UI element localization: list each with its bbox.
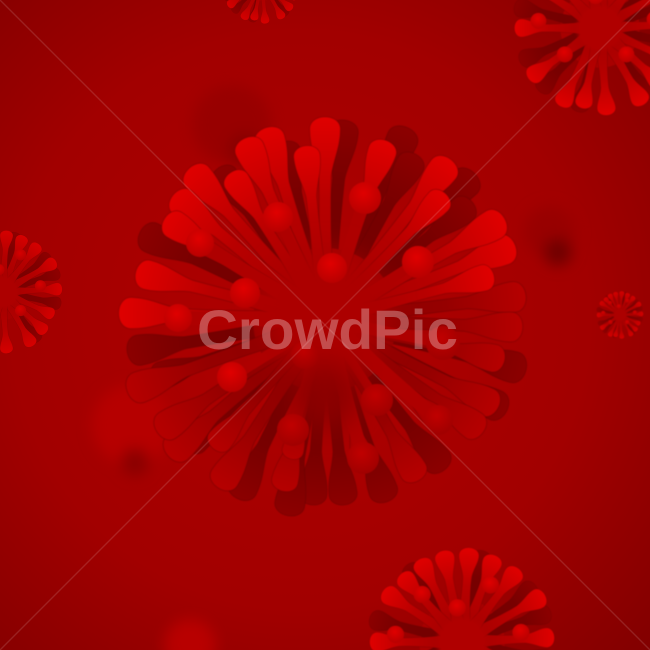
body (253, 248, 397, 392)
blurred virus: small right (596, 291, 643, 339)
watermark text: CrowdPic (197, 298, 458, 361)
back spikes (125, 119, 530, 518)
blurred virus: right (524, 206, 576, 266)
small virus: top (220, 0, 303, 24)
small virus: left (0, 230, 63, 354)
main virus (118, 117, 530, 518)
blurred virus: bottom small (164, 619, 216, 650)
smooth core over spike bases (263, 253, 387, 429)
blurred virus: lower left (92, 385, 172, 476)
virus: bottom (367, 547, 555, 650)
front spike heads (164, 182, 434, 392)
lower spike heads (277, 326, 460, 474)
stems of front-facing spikes (178, 195, 446, 461)
middle spikes (122, 280, 528, 496)
blurred virus: top centre (192, 85, 272, 168)
front spikes (118, 117, 521, 336)
virus: top right (512, 0, 650, 116)
